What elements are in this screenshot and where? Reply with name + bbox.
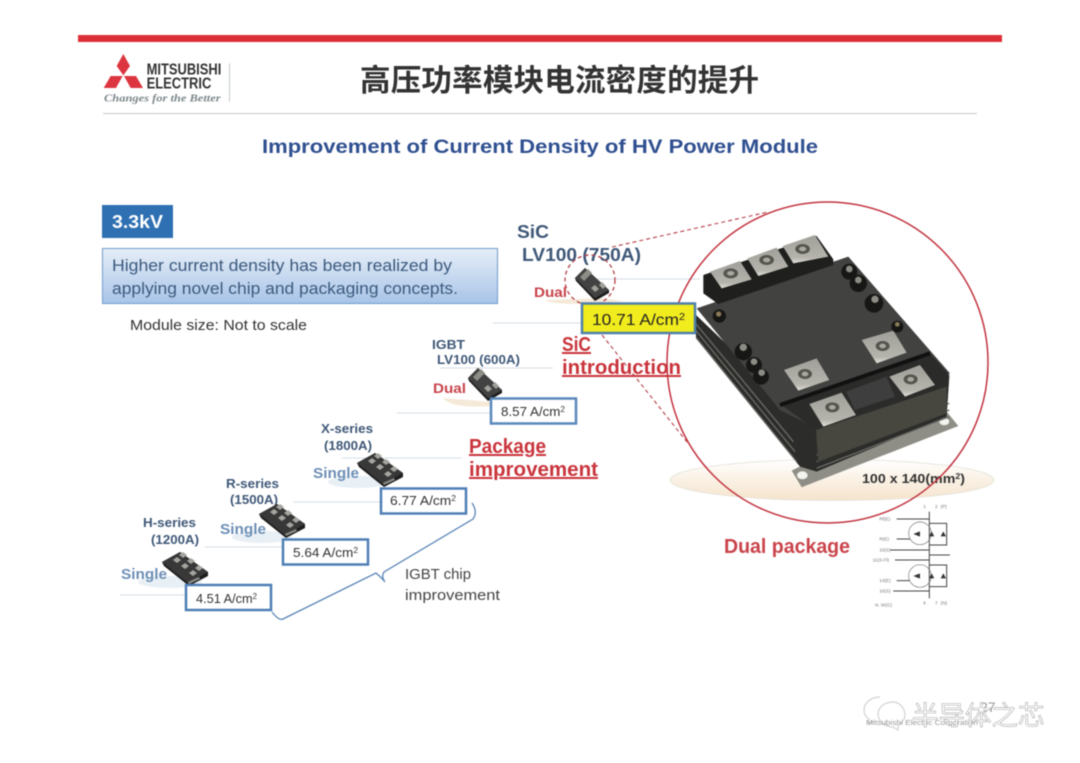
big module size label: 2 [955,472,961,481]
header divider [103,113,977,114]
SiC density box: 10.71 A/cm [592,312,672,329]
step: X-series: 6.77 A/cm [390,493,448,508]
step: H-series: 4.51 A/cm [196,591,254,606]
watermark: Mitsubishi Electric Corporation [866,720,978,727]
circuit diagram: R(E) [879,537,889,542]
SiC density box: 2 [679,312,685,323]
circuit diagram: 14(E) [879,578,891,583]
step: R-series: Single [220,521,266,538]
step: R-series: 2 [353,546,359,555]
zoom dashed guide lines [602,212,768,442]
big module highlight ground ellipse [670,460,994,500]
step: R-series [220,476,368,564]
step: H-series: Single [121,566,167,583]
top red bar [78,35,1002,42]
step: R-series: 5.64 A/cm [293,545,351,560]
scale note: Module size: Not to scale [130,318,307,334]
step: IGBT LV100: LV100 (600A) [437,353,520,367]
step: SiC LV100 [517,222,641,305]
step guide lines [120,278,700,596]
step: X-series [313,421,466,514]
step: X-series: X-series [321,421,373,436]
big module size label: 100 x 140(mm [862,471,947,486]
logo: Mitsubishi Electric: MITSUBISHI [147,62,221,79]
circuit diagram: 2 [935,504,938,509]
big module photo [696,235,958,487]
circuit diagram: (N) [941,601,948,606]
callout: higher current density: Higher current density has been realized by [112,257,453,275]
circuit diagram: (P) [941,504,947,509]
label: Package improvement: improvement [469,459,598,481]
label: IGBT chip improvement: IGBT chip [405,566,471,583]
step: H-series [121,515,271,610]
big highlight circle [667,202,988,523]
circuit diagram: 16(S) [879,589,891,594]
step: R-series: (1500A) [230,492,278,507]
callout: higher current density: applying novel chip and packaging concepts. [112,280,458,298]
step: H-series: 2 [253,592,258,601]
subtitle: Improvement of Current Density of HV Power Module [262,136,818,158]
step: IGBT LV100 [432,338,576,424]
circuit diagram: 11(S-Fl) [873,557,890,562]
circuit diagram: Rf(E) [879,517,891,522]
brace: IGBT chip improvement [272,503,475,619]
step: R-series: R-series [226,476,279,491]
voltage badge [102,205,173,238]
label: SiC introduction [562,334,681,379]
label: IGBT chip improvement: improvement [405,587,501,604]
label: SiC introduction: SiC [562,334,591,356]
step: X-series: Single [313,465,359,482]
logo: Mitsubishi Electric [104,54,230,104]
watermark: 27 [980,699,996,715]
circuit diagram: 6 [923,601,926,606]
label: Dual package: Dual package [724,536,850,558]
step: IGBT LV100: Dual [433,380,466,396]
step: X-series: 2 [451,494,457,503]
label: Package improvement: Package [469,436,546,458]
step: SiC LV100: SiC [517,222,549,242]
title: 高压功率模块电流密度的提升 [360,56,759,100]
step: IGBT LV100: IGBT [432,338,465,352]
watermark: 半导体之芯 [912,694,1044,733]
step: IGBT LV100: 8.57 A/cm [501,404,559,419]
label: IGBT chip improvement [405,566,501,604]
step: H-series: H-series [143,515,196,530]
step: IGBT LV100: 2 [560,405,566,414]
circuit diagram: 7 [935,601,938,606]
step: SiC LV100: LV100 (750A) [522,245,641,265]
circuit diagram: 1 [923,504,926,509]
label: Package improvement [469,436,598,481]
logo: Mitsubishi Electric: Changes for the Better [104,93,222,104]
voltage badge: 3.3kV [112,212,163,232]
logo: Mitsubishi Electric: ELECTRIC [147,75,211,92]
circuit diagram: N. W(G) [875,602,892,607]
SiC density box [582,304,695,333]
label: SiC introduction: introduction [562,357,681,379]
circuit diagram: 10(S) [879,547,891,552]
callout: higher current density [102,248,498,304]
step: SiC LV100: Dual [534,284,567,300]
big module size label: ) [960,471,965,486]
step: X-series: (1800A) [324,438,372,453]
circuit diagram [873,504,950,607]
step: H-series: (1200A) [151,532,199,547]
